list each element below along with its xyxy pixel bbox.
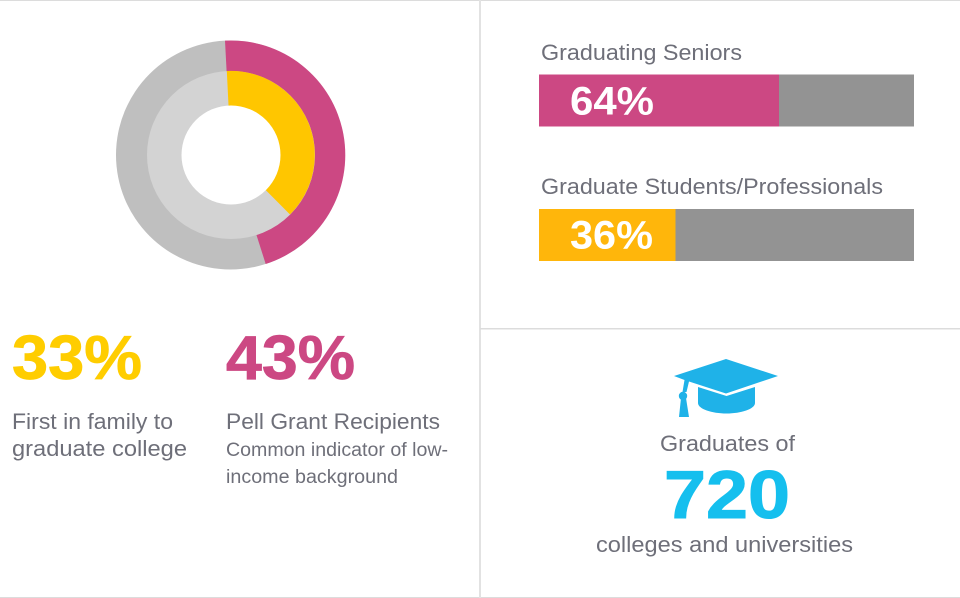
bar: graduate students 36%: 36% — [570, 214, 653, 258]
bar: graduate students 36%: Graduate Students/Professionals — [541, 174, 883, 199]
stat: 33% first in family: 33% — [12, 324, 142, 393]
bar: graduate students 36% — [539, 174, 914, 261]
stat: 43% Pell Grant recipients — [226, 324, 448, 488]
icon: graduation cap — [674, 359, 778, 417]
stat: 720 colleges and universities — [596, 431, 853, 557]
stat: 33% first in family — [12, 324, 187, 461]
stat: 720 colleges and universities: 720 — [664, 457, 790, 533]
outer ring segment: 43% — [225, 40, 345, 264]
bar: graduating seniors 64%: Graduating Seniors — [541, 40, 742, 65]
stat: 43% Pell Grant recipients: Pell Grant Recipients — [226, 409, 440, 434]
bar: graduating seniors 64%: 64% — [570, 80, 654, 124]
stat: 720 colleges and universities: Graduates of — [660, 431, 796, 456]
bar: graduating seniors 64% — [539, 40, 914, 126]
stat: 33% first in family: First in family to — [12, 409, 173, 434]
stat: 43% Pell Grant recipients: income background — [226, 467, 398, 488]
donut chart — [116, 40, 345, 270]
stat: 43% Pell Grant recipients: Common indicator of low- — [226, 440, 448, 461]
stat: 720 colleges and universities: colleges and universities — [596, 532, 853, 557]
stat: 33% first in family: graduate college — [12, 436, 187, 461]
stat: 43% Pell Grant recipients: 43% — [226, 324, 355, 393]
inner ring segment: 33% — [227, 71, 315, 214]
